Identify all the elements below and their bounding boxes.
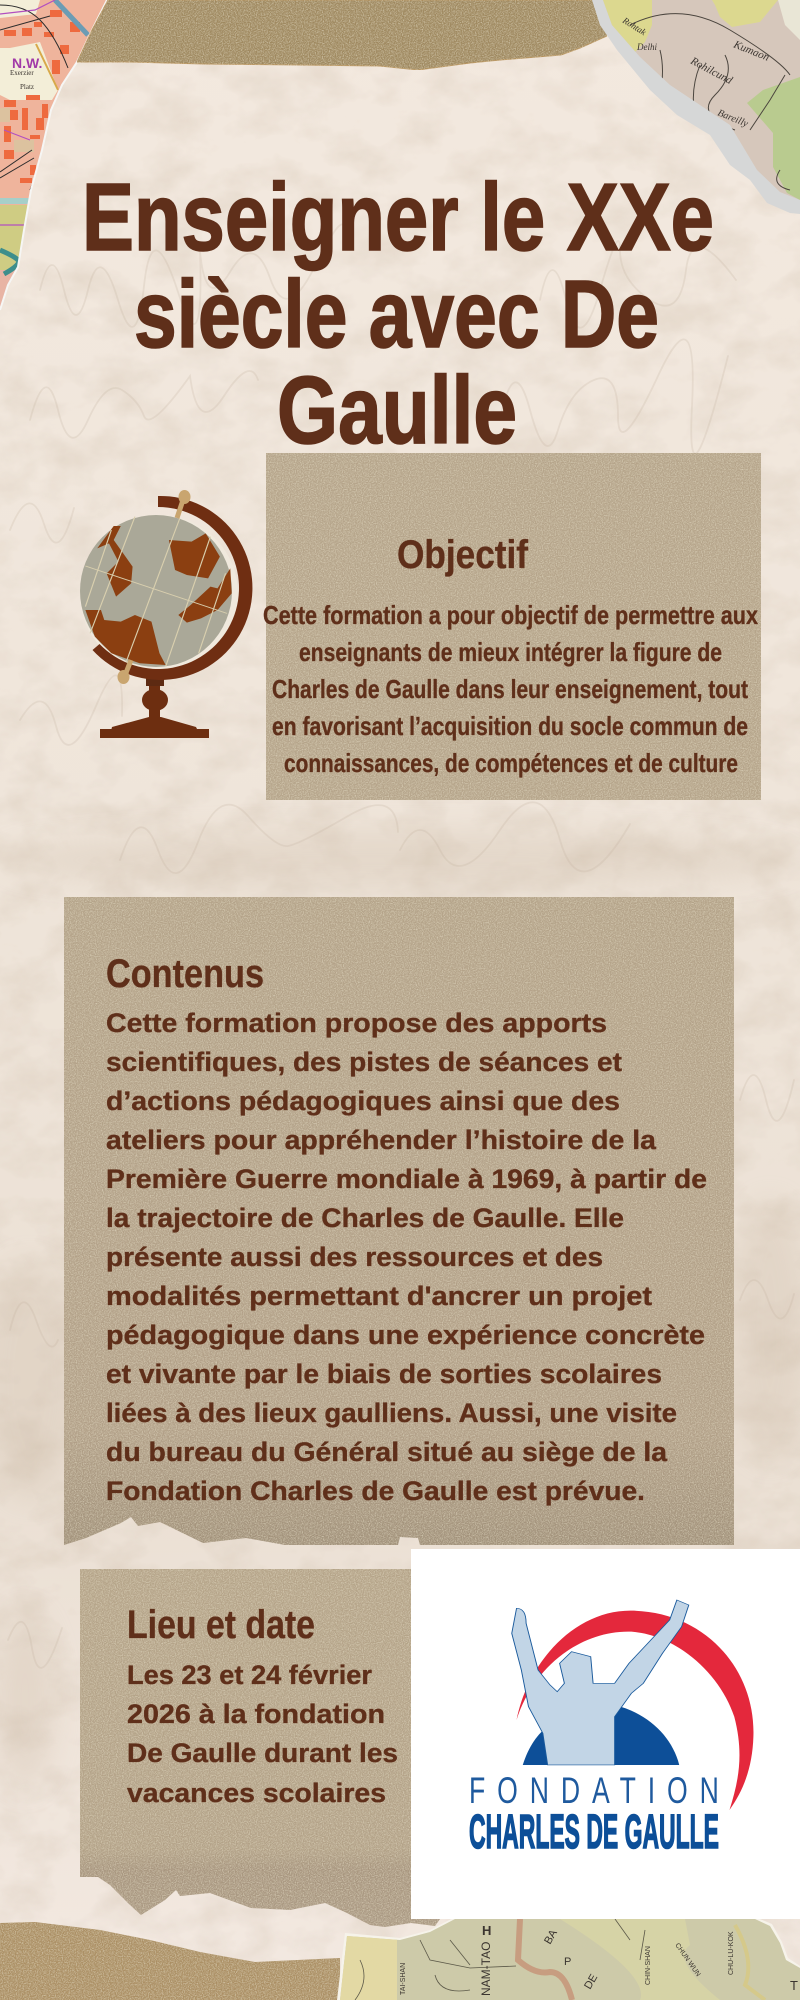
map labels: CHU-LU-KOK	[728, 1931, 735, 1975]
logo: Fondation Charles de Gaulle	[411, 1549, 800, 1919]
wordmark: FONDATION	[469, 1770, 719, 1811]
icon: globe	[80, 490, 252, 738]
text block: contenus: d’actions pédagogiques ainsi que des	[106, 1086, 620, 1116]
map labels: T	[790, 1978, 798, 1993]
icon: red arc	[517, 1611, 753, 1810]
text block: contenus: modalités permettant d'ancrer un projet	[106, 1281, 652, 1311]
map labels: Kumaon	[731, 38, 771, 64]
text block: contenus: Première Guerre mondiale à 1969, à partir de	[106, 1164, 707, 1194]
map labels	[400, 1923, 798, 1996]
map labels: NAM-TAO	[479, 1942, 493, 1996]
text block: objectif	[263, 600, 758, 778]
title: Gaulle	[277, 357, 517, 464]
torn cardboard: bottom left	[0, 1922, 340, 2000]
map labels: CHIN-SHAN	[645, 1946, 652, 1985]
map labels: Rohilcund	[688, 55, 735, 87]
text block: lieu et date: De Gaulle durant les	[127, 1738, 398, 1768]
text block: contenus: du bureau du Général situé au siège de la	[106, 1437, 668, 1467]
text block: contenus	[106, 1008, 707, 1506]
text block: contenus: liées à des lieux gaulliens. Aussi, une visite	[106, 1398, 677, 1428]
text block: contenus: la trajectoire de Charles de Gaulle. Elle	[106, 1203, 624, 1233]
map label: Platz	[20, 83, 34, 91]
panel: lieu et date	[80, 1569, 440, 1927]
icon: blue dome	[523, 1705, 679, 1765]
wordmark	[469, 1770, 719, 1859]
map: top right corner	[590, 0, 800, 220]
map label	[10, 58, 42, 89]
map labels: Rohtak	[620, 15, 649, 38]
map label: Exerzier	[10, 69, 34, 77]
map labels: Delhi	[636, 42, 657, 52]
text block: lieu et date: vacances scolaires	[127, 1778, 386, 1808]
text block: contenus: ateliers pour appréhender l’histoire de la	[106, 1125, 657, 1155]
panel: contenus	[64, 897, 734, 1545]
text block: lieu et date: 2026 à la fondation	[127, 1699, 385, 1729]
heading: objectif: Objectif	[397, 533, 529, 577]
map labels: CHUN WUN	[673, 1942, 701, 1978]
text block: lieu et date	[127, 1660, 398, 1808]
map labels: DE	[582, 1972, 600, 1992]
map labels: P	[564, 1956, 571, 1968]
icon: raised arms silhouette	[512, 1600, 689, 1765]
text block: contenus: Fondation Charles de Gaulle est prévue.	[106, 1476, 645, 1506]
map labels	[620, 15, 771, 130]
map label: N.W.	[12, 55, 42, 71]
text block: contenus: scientifiques, des pistes de séances et	[106, 1047, 622, 1077]
text block: lieu et date: Les 23 et 24 février	[127, 1660, 372, 1690]
map: bottom right corner	[337, 1917, 800, 2000]
text block: contenus: présente aussi des ressources et des	[106, 1242, 603, 1272]
text block: contenus: et vivante par le biais de sorties scolaires	[106, 1359, 662, 1389]
torn cardboard: top	[77, 0, 607, 70]
map labels: BA	[542, 1927, 560, 1946]
map labels: H	[482, 1923, 491, 1938]
text block: contenus: Cette formation propose des apports	[106, 1008, 607, 1038]
text block: contenus: pédagogique dans une expérience concrète	[106, 1320, 705, 1350]
map labels: Bareilly	[716, 108, 750, 130]
heading: contenus: Contenus	[106, 952, 264, 996]
title: siècle avec De	[134, 261, 659, 368]
map labels: TAI-SHAN	[400, 1963, 407, 1995]
panel: objectif	[263, 453, 761, 800]
title	[82, 164, 714, 464]
heading: lieu et date: Lieu et date	[127, 1603, 315, 1647]
map: top left corner	[0, 0, 110, 310]
